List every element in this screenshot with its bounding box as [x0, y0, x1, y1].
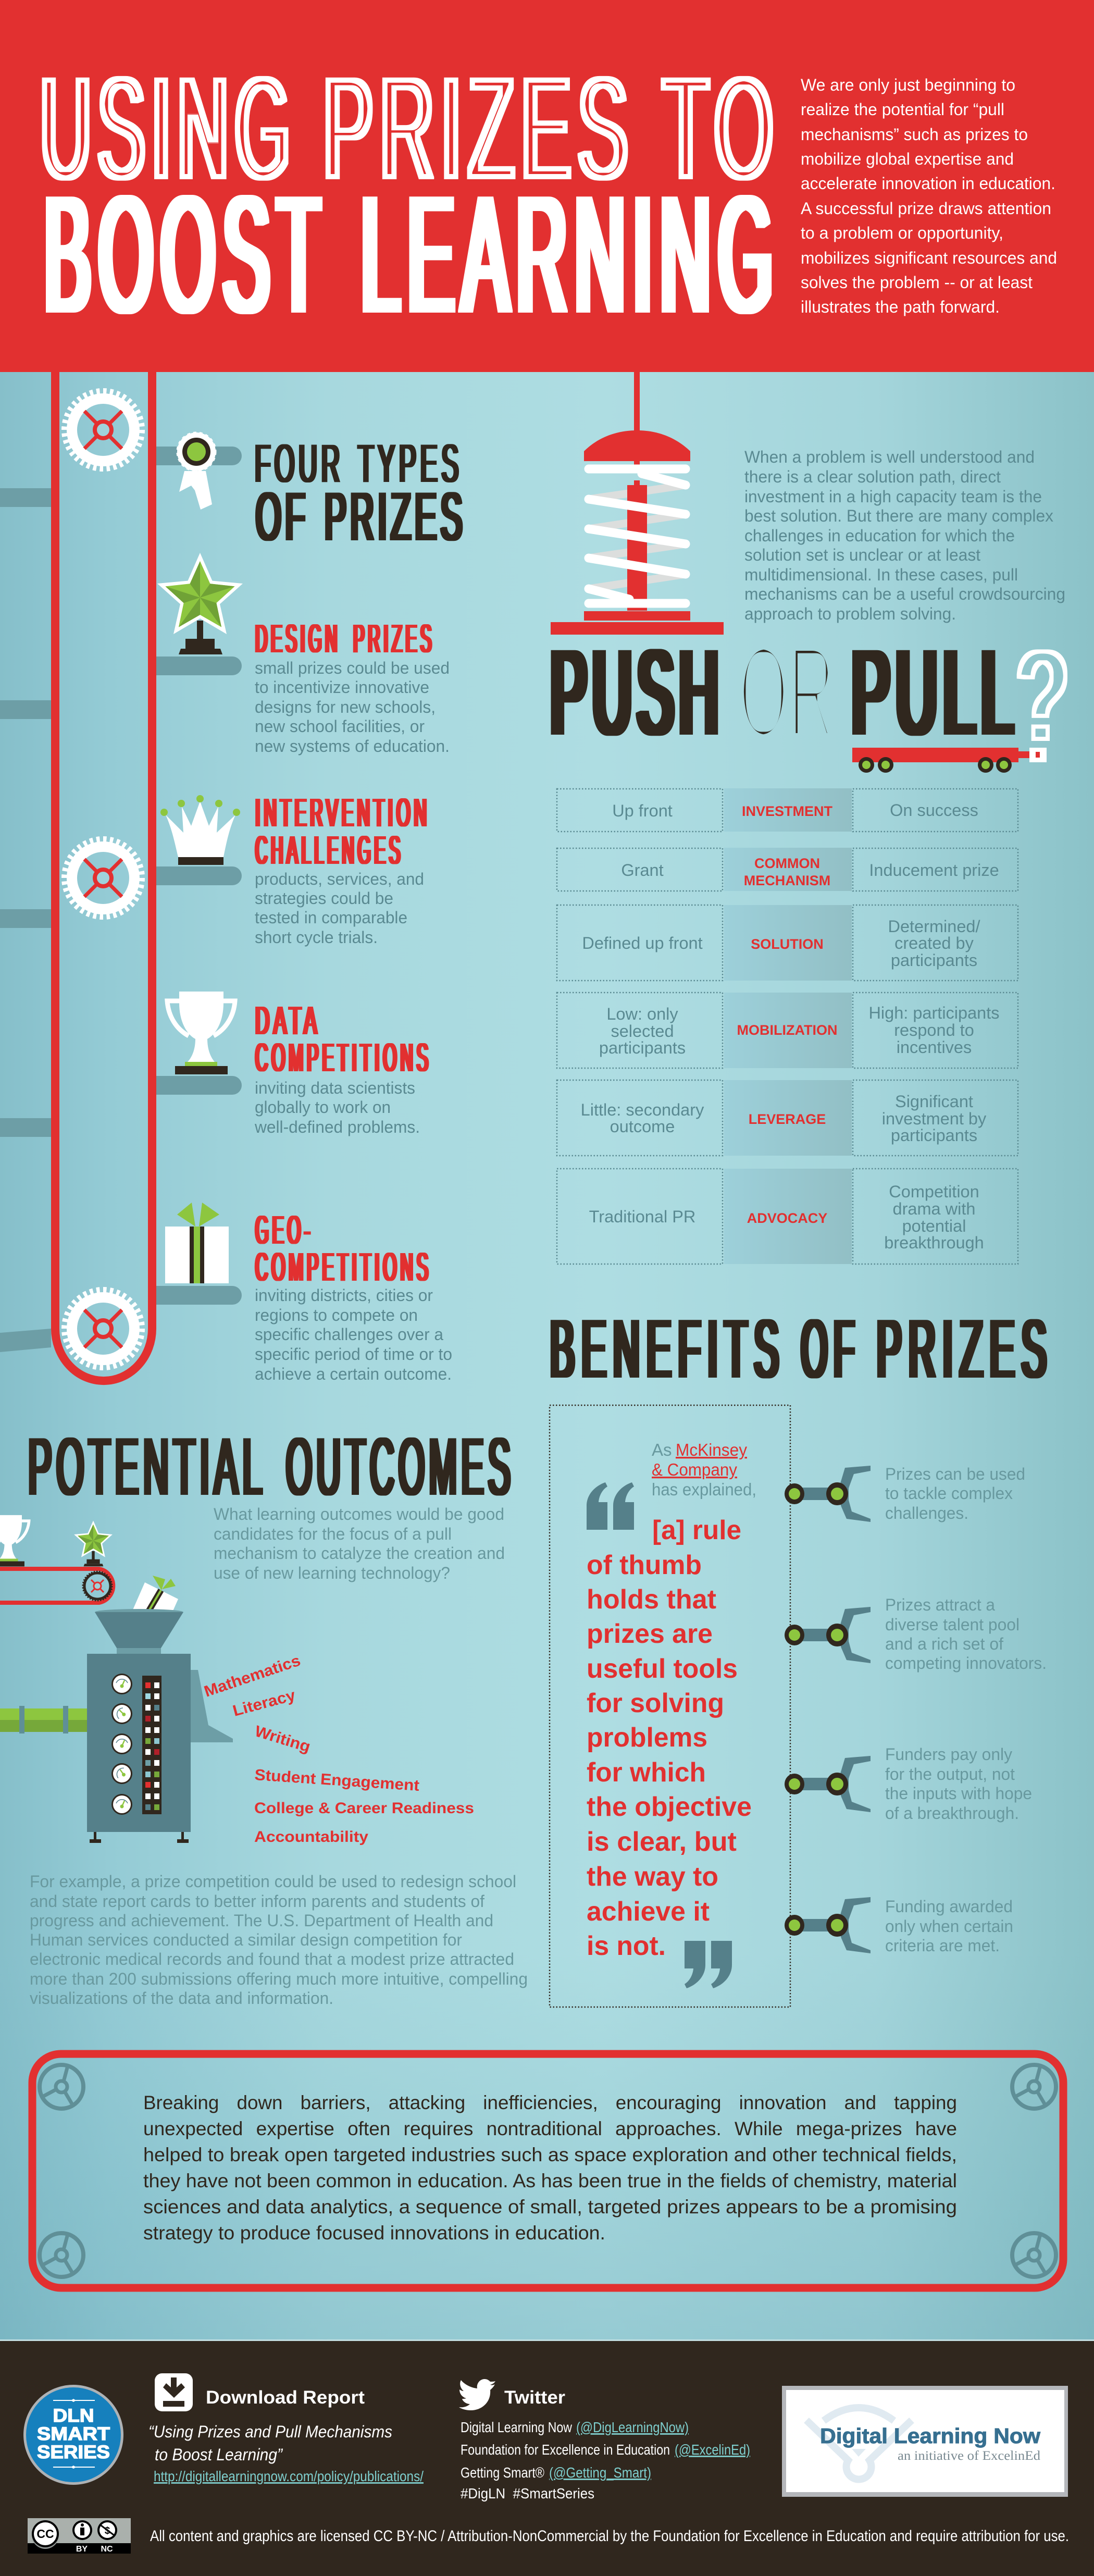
benefit 1: challenges. — [885, 1504, 968, 1522]
heading: push or pull: PUSH — [551, 625, 724, 759]
badge: DLN smart series: SMART — [37, 2424, 110, 2444]
badge: creative commons: $ — [105, 2525, 110, 2536]
machine body — [87, 1654, 191, 1832]
text: for example paragraph: and state report cards to better inform parents and students of — [30, 1892, 484, 1911]
text: push vs pull intro — [744, 448, 1065, 623]
title line 1: TO — [663, 47, 780, 209]
row: mobilization: participants — [599, 1038, 686, 1057]
gear bottom — [65, 1290, 142, 1367]
panel: conveyor belt — [0, 372, 242, 1381]
quote text: for solving — [587, 1688, 724, 1718]
icon: truck — [852, 748, 1047, 773]
outcomes list: Writing — [253, 1723, 313, 1756]
outcomes list: Mathematics — [202, 1652, 303, 1701]
heading: potential outcomes: POTENTIAL — [28, 1421, 267, 1512]
text: CHALLENGES — [255, 828, 404, 873]
conclusion text: sciences and data analytics, a sequence of small, targeted prizes appears to be a promising — [143, 2196, 957, 2218]
row: leverage: investment by — [882, 1109, 987, 1128]
chute — [191, 1670, 233, 1742]
intro paragraph: mobilize global expertise and — [801, 150, 1014, 168]
row: advocacy: ADVOCACY — [747, 1210, 827, 1226]
quote text: is clear, but — [587, 1827, 737, 1857]
twitter list: Getting Smart® — [461, 2464, 544, 2481]
benefit 4 — [785, 1897, 1013, 1955]
text: OUTCOMES — [286, 1421, 515, 1512]
gear top — [65, 391, 142, 468]
funnel — [95, 1609, 183, 1654]
icon: ribbon — [177, 432, 216, 510]
intro paragraph: mechanisms” such as prizes to — [801, 125, 1028, 144]
text: outcomes question: mechanism to catalyze the creation and — [214, 1544, 505, 1563]
row: advocacy: drama with — [893, 1199, 975, 1218]
twitter list: Digital Learning Now — [461, 2419, 573, 2435]
illustration: spring press — [551, 372, 724, 635]
benefit 2: diverse talent pool — [885, 1615, 1020, 1634]
row: leverage — [581, 1092, 987, 1145]
row: solution — [582, 917, 980, 970]
quote text: useful tools — [587, 1654, 738, 1684]
benefit 1: Prizes can be used — [885, 1465, 1025, 1483]
footer — [0, 2339, 1094, 2576]
badge: creative commons — [28, 2518, 131, 2554]
green pipe — [0, 1706, 87, 1733]
download report: http://digitallearningnow.com/policy/publications/ — [154, 2468, 424, 2484]
outcomes list — [202, 1652, 474, 1846]
badge: creative commons: CC — [36, 2527, 54, 2541]
prize: geo-competitions: regions to compete on — [255, 1306, 418, 1324]
text: outcomes question: candidates for the focus of a pull — [214, 1525, 452, 1543]
badge: DLN smart series: SERIES — [37, 2442, 110, 2462]
row: advocacy: breakthrough — [884, 1233, 984, 1252]
attribution: McKinsey — [676, 1440, 747, 1459]
row: advocacy: Traditional PR — [589, 1207, 695, 1226]
panel: mckinsey quote — [550, 1405, 790, 2007]
text: for example paragraph — [30, 1872, 528, 2008]
belt — [55, 372, 152, 1381]
row: solution: Determined/ — [888, 917, 980, 936]
gauges — [108, 1674, 136, 1815]
row: investment: Up front — [612, 801, 673, 820]
row: solution: SOLUTION — [751, 936, 824, 952]
attribution: & Company — [652, 1460, 737, 1479]
text: for example paragraph: visualizations of the data and information. — [30, 1989, 333, 2008]
twitter list: Twitter — [504, 2387, 565, 2408]
text: for example paragraph: progress and achievement. The U.S. Department of Health and — [30, 1911, 493, 1930]
text: COMPETITIONS — [255, 1245, 432, 1290]
heading: push or pull: ? — [1018, 626, 1065, 765]
twitter list: (@Getting_Smart) — [549, 2464, 651, 2481]
prize: design prizes: small prizes could be used — [255, 659, 450, 677]
row: investment — [612, 801, 978, 820]
outcomes list: Literacy — [231, 1687, 297, 1720]
icon: download — [155, 2373, 193, 2411]
row: common mechanism: COMMON — [754, 856, 820, 871]
conclusion text — [143, 2092, 957, 2244]
center cells — [724, 788, 852, 1264]
text: outcomes question — [214, 1505, 505, 1582]
text: DESIGN PRIZES — [255, 616, 435, 661]
icon: twitter bird — [459, 2379, 495, 2410]
badge: creative commons: NC — [101, 2545, 113, 2554]
benefit 1 — [785, 1465, 1025, 1522]
text: FOUR TYPES — [255, 434, 463, 494]
quote text: problems — [587, 1723, 707, 1753]
row: leverage: Little: secondary — [581, 1100, 704, 1119]
quote text: for which — [587, 1757, 706, 1788]
twitter list: Foundation for Excellence in Education — [461, 2442, 670, 2458]
row: common mechanism: MECHANISM — [744, 873, 830, 888]
intro paragraph: solves the problem -- or at least — [801, 273, 1033, 292]
row: mobilization: High: participants — [868, 1004, 1000, 1022]
row: solution: Defined up front — [582, 934, 703, 952]
badge: DLN smart series — [23, 2385, 123, 2485]
text: push vs pull intro: challenges in education for which the — [744, 526, 1015, 545]
conclusion text: unexpected expertise often requires nontraditional approaches. While mega-prizes have — [143, 2118, 957, 2139]
text: for example paragraph: electronic medical records and found that a modest prize attracted — [30, 1950, 514, 1968]
title line 2: BOOST — [44, 162, 328, 347]
quote text: prizes are — [587, 1619, 713, 1649]
header — [0, 0, 1094, 372]
row: mobilization: selected — [611, 1022, 674, 1041]
row: mobilization — [599, 1004, 1000, 1057]
badge: creative commons: BY — [76, 2545, 88, 2554]
row: common mechanism: Grant — [621, 861, 664, 880]
prize: geo-competitions: specific challenges over a — [255, 1325, 443, 1344]
prize: geo-competitions — [255, 1208, 452, 1383]
text: push vs pull intro: solution set is unclear or at least — [744, 546, 980, 564]
prize: data competitions: inviting data scientists — [255, 1079, 415, 1097]
prize: data competitions: globally to work on — [255, 1098, 391, 1117]
row: solution: participants — [891, 951, 977, 970]
row: advocacy — [589, 1182, 984, 1252]
dotted boxes — [557, 789, 1018, 1264]
prize: design prizes: new systems of education. — [255, 737, 450, 756]
benefit 4: criteria are met. — [885, 1936, 1000, 1955]
row: mobilization: incentives — [897, 1038, 972, 1057]
benefit 3: of a breakthrough. — [885, 1804, 1019, 1823]
text: INTERVENTION — [255, 790, 430, 835]
intro paragraph — [801, 76, 1057, 316]
text: for example paragraph: For example, a prize competition could be used to redesign school — [30, 1872, 516, 1891]
row: leverage: participants — [891, 1126, 977, 1145]
twitter list: (@ExcelinEd) — [675, 2442, 750, 2458]
intro paragraph: to a problem or opportunity, — [801, 224, 1003, 242]
outcomes list: Accountability — [254, 1828, 368, 1846]
download report: “Using Prizes and Pull Mechanisms — [148, 2422, 392, 2441]
falling gift — [132, 1576, 178, 1613]
row: investment: On success — [890, 801, 978, 820]
prize: design prizes — [255, 616, 450, 756]
quote text: the objective — [587, 1792, 752, 1822]
text: push vs pull intro: mechanisms can be a useful crowdsourcing — [744, 585, 1065, 603]
quote text: achieve it — [587, 1897, 710, 1927]
quote text: is not. — [587, 1931, 666, 1961]
conclusion text: helped to break open targeted industries such as space exploration and other technical fields, — [143, 2144, 957, 2165]
row: mobilization: Low: only — [606, 1005, 678, 1023]
intro paragraph: illustrates the path forward. — [801, 298, 1000, 316]
text: push vs pull intro: best solution. But there are many complex — [744, 506, 1053, 525]
shelves — [156, 447, 242, 1305]
icon: star trophy — [157, 553, 243, 654]
twitter list: (@DigLearningNow) — [576, 2419, 689, 2435]
row: leverage: outcome — [610, 1117, 675, 1136]
quote text: of thumb — [587, 1550, 702, 1580]
left stubs — [0, 488, 51, 1352]
quote text — [587, 1515, 752, 1961]
twitter list — [461, 2387, 750, 2501]
quote text: the way to — [587, 1862, 718, 1892]
row: solution: created by — [894, 934, 974, 952]
text: OF PRIZES — [256, 478, 466, 554]
legs — [90, 1832, 189, 1843]
heading: benefits of prizes: BENEFITS — [550, 1303, 786, 1395]
corner wheels — [40, 2065, 1056, 2277]
close quote mark — [685, 1941, 732, 1988]
text: push vs pull intro: approach to problem solving. — [744, 604, 956, 623]
text: push vs pull intro: investment in a high capacity team is the — [744, 487, 1042, 506]
intro paragraph: We are only just beginning to — [801, 76, 1015, 94]
benefit 2 — [785, 1595, 1047, 1673]
title line 1: PRIZES — [323, 47, 635, 209]
text: push vs pull intro: When a problem is well understood and — [744, 448, 1035, 466]
badge: DLN smart series: DLN — [53, 2406, 94, 2426]
intro paragraph: A successful prize draws attention — [801, 199, 1051, 218]
row: leverage: LEVERAGE — [749, 1111, 826, 1127]
download report: to Boost Learning” — [155, 2445, 283, 2464]
download report: Download Report — [206, 2387, 365, 2408]
download report — [148, 2387, 424, 2484]
row: leverage: Significant — [895, 1092, 973, 1111]
logo: digital learning now: an initiative of ExcelinEd — [898, 2449, 1041, 2463]
logo: digital learning now — [782, 2386, 1068, 2497]
attribution: has explained, — [652, 1480, 756, 1499]
background — [0, 372, 1094, 2347]
conclusion text: they have not been common in education. As has been true in the fields of chemistry, material — [143, 2170, 957, 2191]
benefit 3: the inputs with hope — [885, 1784, 1032, 1803]
prize: intervention challenges: strategies could be — [255, 889, 393, 908]
quote text: [a] rule — [652, 1515, 741, 1545]
heading: benefits of prizes: OF — [801, 1303, 861, 1395]
text: outcomes question: What learning outcomes would be good — [214, 1505, 504, 1524]
prize: data competitions: well-defined problems. — [254, 1118, 420, 1136]
quote text: holds that — [587, 1584, 716, 1615]
text: for example paragraph: more than 200 submissions offering much more intuitive, compelling — [30, 1970, 528, 1988]
text: COMPETITIONS — [255, 1035, 432, 1080]
outcomes list: Student Engagement — [254, 1766, 420, 1794]
benefit 4: Funding awarded — [885, 1897, 1013, 1916]
gear middle — [65, 839, 142, 917]
benefit 2: and a rich set of — [885, 1634, 1003, 1653]
row: mobilization: respond to — [894, 1021, 974, 1039]
prize: data competitions — [254, 998, 432, 1136]
prize: geo-competitions: inviting districts, cities or — [255, 1286, 433, 1305]
icon: gift — [165, 1203, 229, 1283]
logo: digital learning now: Digital Learning Now — [820, 2424, 1040, 2448]
prize: design prizes: designs for new schools, — [255, 698, 436, 716]
benefit 2: competing innovators. — [885, 1654, 1047, 1673]
text: outcomes question: use of new learning technology? — [214, 1564, 450, 1582]
outcomes list: College & Career Readiness — [254, 1800, 474, 1817]
row: common mechanism: Inducement prize — [869, 861, 999, 880]
benefit 3 — [785, 1745, 1032, 1823]
benefit 1: to tackle complex — [885, 1484, 1013, 1503]
light panel — [142, 1676, 161, 1814]
prize: design prizes: new school facilities, or — [255, 717, 425, 736]
comparison table — [557, 788, 1018, 1264]
text: push vs pull intro: there is a clear solution path, direct — [744, 467, 1001, 486]
title line 1: USING — [40, 47, 296, 209]
text: for example paragraph: Human services conducted a similar design competition for — [30, 1930, 462, 1949]
prize: data competitions: DATA — [255, 998, 321, 1043]
benefit 3: for the output, not — [885, 1765, 1015, 1784]
prize: intervention challenges: short cycle trials. — [255, 928, 378, 947]
illustration: machine — [0, 1576, 233, 1843]
conclusion text: Breaking down barriers, attacking inefficiencies, encouraging innovation and tapping — [143, 2092, 957, 2113]
prize: intervention challenges: tested in comparable — [255, 908, 407, 927]
panel: conclusion — [32, 2054, 1063, 2288]
intro paragraph: realize the potential for “pull — [801, 100, 1004, 119]
attribution: As — [652, 1440, 672, 1459]
benefit 3: Funders pay only — [885, 1745, 1012, 1764]
text: push vs pull intro: multidimensional. In these cases, pull — [744, 565, 1018, 584]
conclusion text: strategy to produce focused innovations in education. — [143, 2222, 605, 2244]
open quote mark — [587, 1482, 634, 1530]
row: common mechanism — [621, 856, 999, 888]
icon: crown — [160, 795, 240, 865]
benefit 4: only when certain — [885, 1917, 1013, 1936]
prize: geo-competitions: GEO- — [255, 1208, 314, 1253]
attribution — [652, 1440, 756, 1499]
prize: intervention challenges: products, services, and — [255, 870, 424, 888]
row: advocacy: Competition — [889, 1182, 979, 1201]
heading: push or pull — [551, 619, 1065, 765]
row: advocacy: potential — [902, 1217, 966, 1235]
prize: design prizes: to incentivize innovative — [255, 678, 429, 697]
prize: intervention challenges — [255, 790, 430, 947]
heading: push or pull: OR — [739, 619, 835, 764]
prize: geo-competitions: achieve a certain outcome. — [255, 1365, 452, 1383]
benefit 2: Prizes attract a — [885, 1595, 995, 1614]
prize: geo-competitions: specific period of time or to — [255, 1345, 452, 1364]
icon: trophy — [167, 992, 235, 1074]
row: mobilization: MOBILIZATION — [737, 1022, 837, 1038]
row: investment: INVESTMENT — [742, 803, 833, 819]
intro paragraph: accelerate innovation in education. — [801, 174, 1055, 193]
twitter list: #DigLN #SmartSeries — [461, 2485, 594, 2501]
heading: four types of prizes — [255, 434, 466, 554]
illustration: small conveyor — [0, 1515, 113, 1603]
intro paragraph: mobilizes significant resources and — [801, 249, 1057, 267]
